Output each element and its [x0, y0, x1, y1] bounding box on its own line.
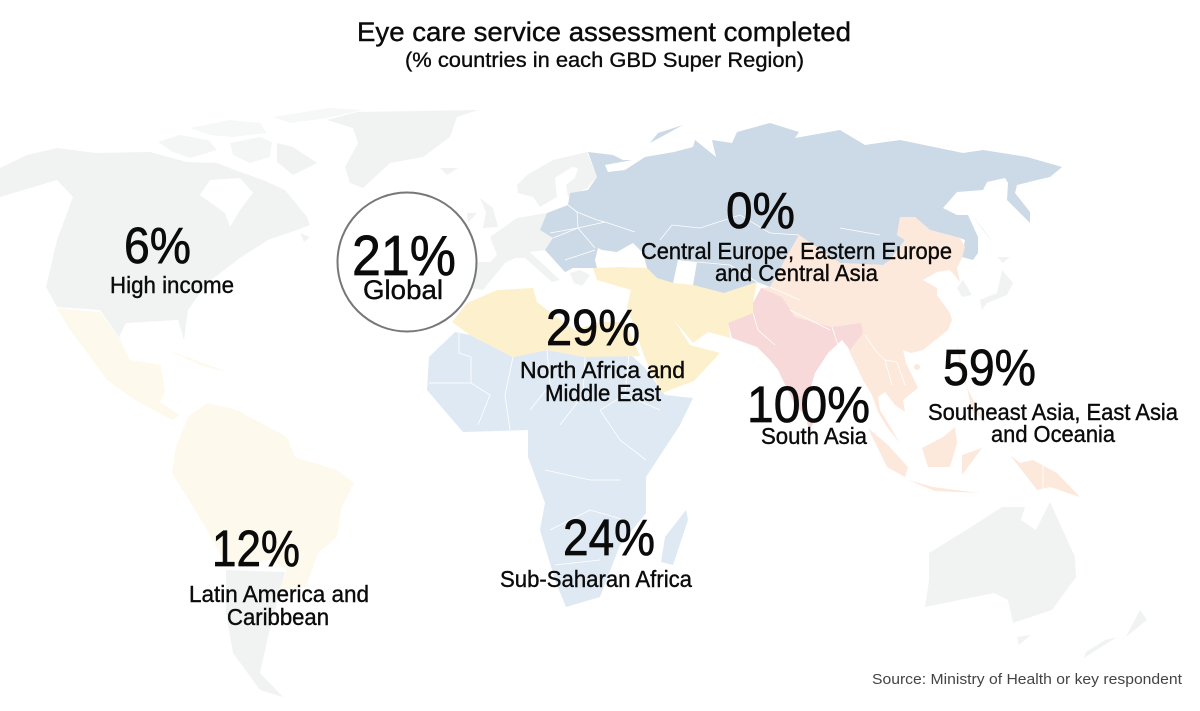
- label: high income: 6%: [124, 217, 191, 274]
- label: high income: [110, 217, 234, 298]
- region: Southeast Asia, East Asia and Oceania: [761, 217, 1080, 497]
- region: South Asia: [728, 288, 863, 427]
- label: north africa and middle east: [520, 299, 685, 406]
- callout: global: 21%: [352, 224, 456, 288]
- subtitle: (% countries in each GBD Super Region): [405, 49, 804, 72]
- region: North Africa and Middle East: [452, 267, 757, 393]
- region: Latin America and Caribbean: [57, 308, 354, 590]
- callout: global: [338, 192, 476, 332]
- label: north africa and middle east: Middle East: [545, 380, 662, 406]
- source note: Source: Ministry of Health or key respondent: [872, 672, 1182, 688]
- label: latin america: Caribbean: [227, 604, 329, 630]
- label: north africa and middle east: 29%: [546, 299, 640, 356]
- region: Sub-Saharan Africa: [427, 332, 693, 607]
- callout: global: Global: [363, 275, 443, 305]
- label: south asia: South Asia: [761, 423, 867, 449]
- label: central europe: 0%: [726, 182, 795, 239]
- label: north africa and middle east: North Africa and: [520, 357, 685, 383]
- label: sub-saharan africa: [500, 509, 692, 592]
- label: sub-saharan africa: 24%: [563, 509, 655, 566]
- label: southeast asia: 59%: [943, 339, 1036, 396]
- title: Eye care service assessment completed: [357, 17, 851, 47]
- label: latin america: Latin America and: [189, 581, 369, 607]
- label: latin america: 12%: [212, 520, 300, 577]
- label: southeast asia: and Oceania: [991, 421, 1115, 447]
- label: sub-saharan africa: Sub-Saharan Africa: [500, 566, 692, 592]
- world map: [0, 108, 1147, 697]
- label: high income: High income: [110, 272, 234, 298]
- label: south asia: 100%: [747, 376, 870, 433]
- label: central europe: Central Europe, Eastern Europe: [641, 238, 952, 264]
- region: Central Europe, Eastern Europe and Central Asia: [540, 123, 1062, 293]
- region: high income: [0, 108, 1147, 697]
- label: latin america: [189, 520, 369, 630]
- label: southeast asia: Southeast Asia, East Asia: [928, 399, 1178, 425]
- label: southeast asia: [928, 339, 1178, 447]
- label: central europe: [641, 182, 952, 286]
- label: central europe: and Central Asia: [715, 260, 878, 286]
